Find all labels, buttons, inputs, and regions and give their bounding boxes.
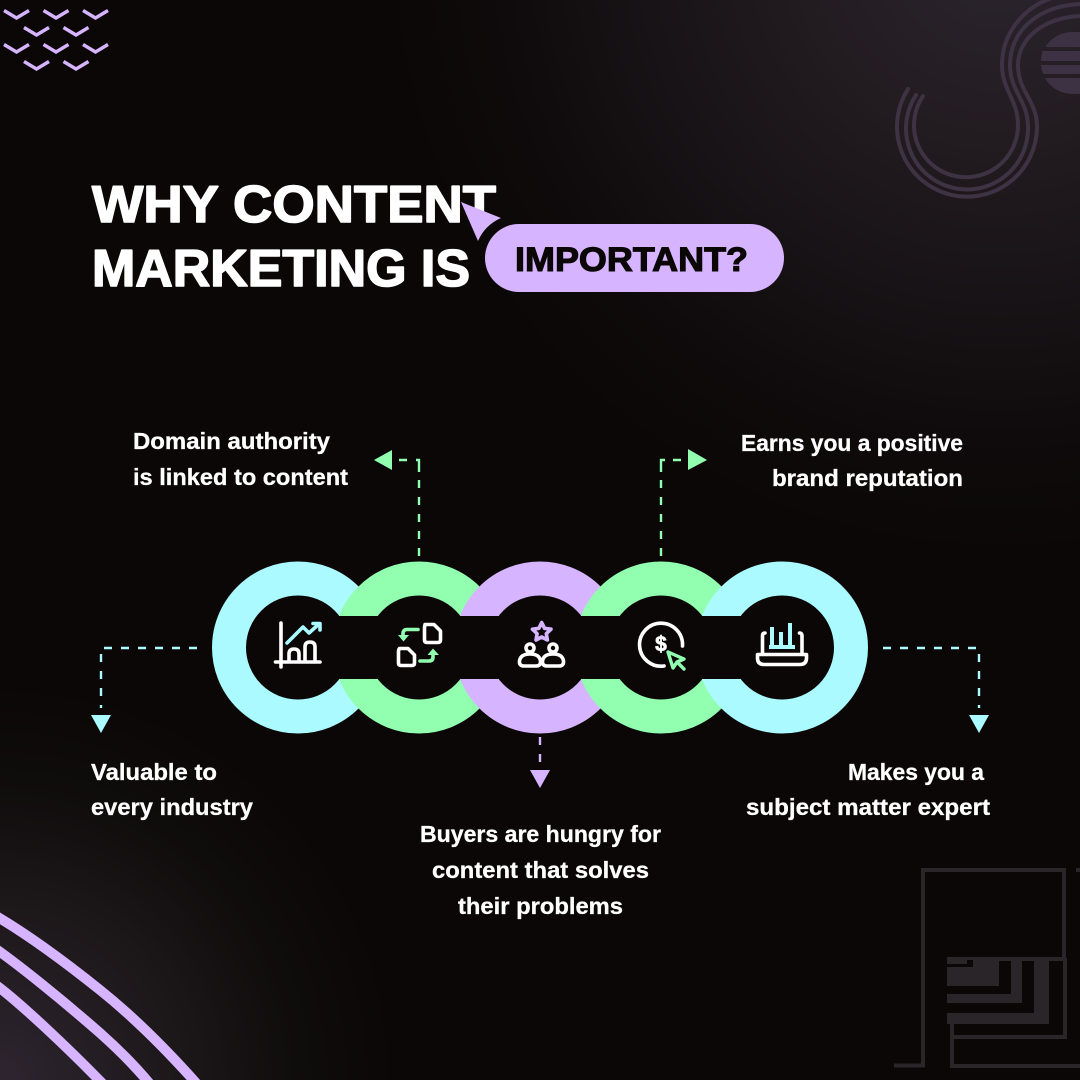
- highlight pill: important: [485, 224, 784, 292]
- callout: valuable to every industry: every industry: [91, 794, 253, 820]
- icon: exchanging documents: [398, 624, 440, 666]
- callout: domain authority: is linked to content: [133, 464, 348, 490]
- title: WHY CONTENT: [92, 176, 496, 234]
- decoration: chevron pattern top left: [4, 10, 108, 69]
- icon: laptop with bars: [758, 623, 806, 664]
- callout: subject matter expert: subject matter expert: [746, 794, 990, 820]
- callout: domain authority: Domain authority: [133, 428, 330, 454]
- callout: buyers: their problems: [458, 893, 623, 919]
- callout: buyers: [420, 821, 661, 919]
- callout: brand reputation: Earns you a positive: [741, 430, 963, 456]
- arrow: to domain authority: [374, 450, 419, 556]
- callout: valuable to every industry: [91, 759, 253, 820]
- decoration: maze lines bottom right: [894, 870, 1080, 1066]
- title: [92, 176, 496, 298]
- arrow: to buyers: [530, 737, 550, 788]
- arrow: to brand reputation: [661, 449, 707, 556]
- decoration: curved lines and striped circle top right: [897, 0, 1080, 197]
- decoration: curved stripes bottom left: [0, 916, 197, 1080]
- callout: subject matter expert: [746, 759, 990, 820]
- callout: buyers: content that solves: [432, 857, 649, 883]
- callout: domain authority: [133, 428, 348, 490]
- icon: cursor pointer: [461, 202, 501, 241]
- icon: people and star: [519, 622, 564, 666]
- arrow: to valuable: [91, 648, 197, 733]
- icon: growth chart: [276, 623, 320, 667]
- callout: brand reputation: [741, 430, 963, 491]
- callout: valuable to every industry: Valuable to: [91, 759, 217, 785]
- chain of five rings: [229, 578, 851, 716]
- callout: brand reputation: brand reputation: [772, 465, 963, 491]
- title: MARKETING IS: [92, 240, 470, 298]
- arrow: to subject matter expert: [883, 648, 989, 733]
- callout: buyers: Buyers are hungry for: [420, 821, 661, 847]
- icon: dollar and cursor: [640, 623, 684, 669]
- icon: dollar and cursor: $: [655, 633, 667, 656]
- highlight pill: important: IMPORTANT?: [515, 241, 748, 279]
- callout: subject matter expert: Makes you a: [848, 759, 984, 785]
